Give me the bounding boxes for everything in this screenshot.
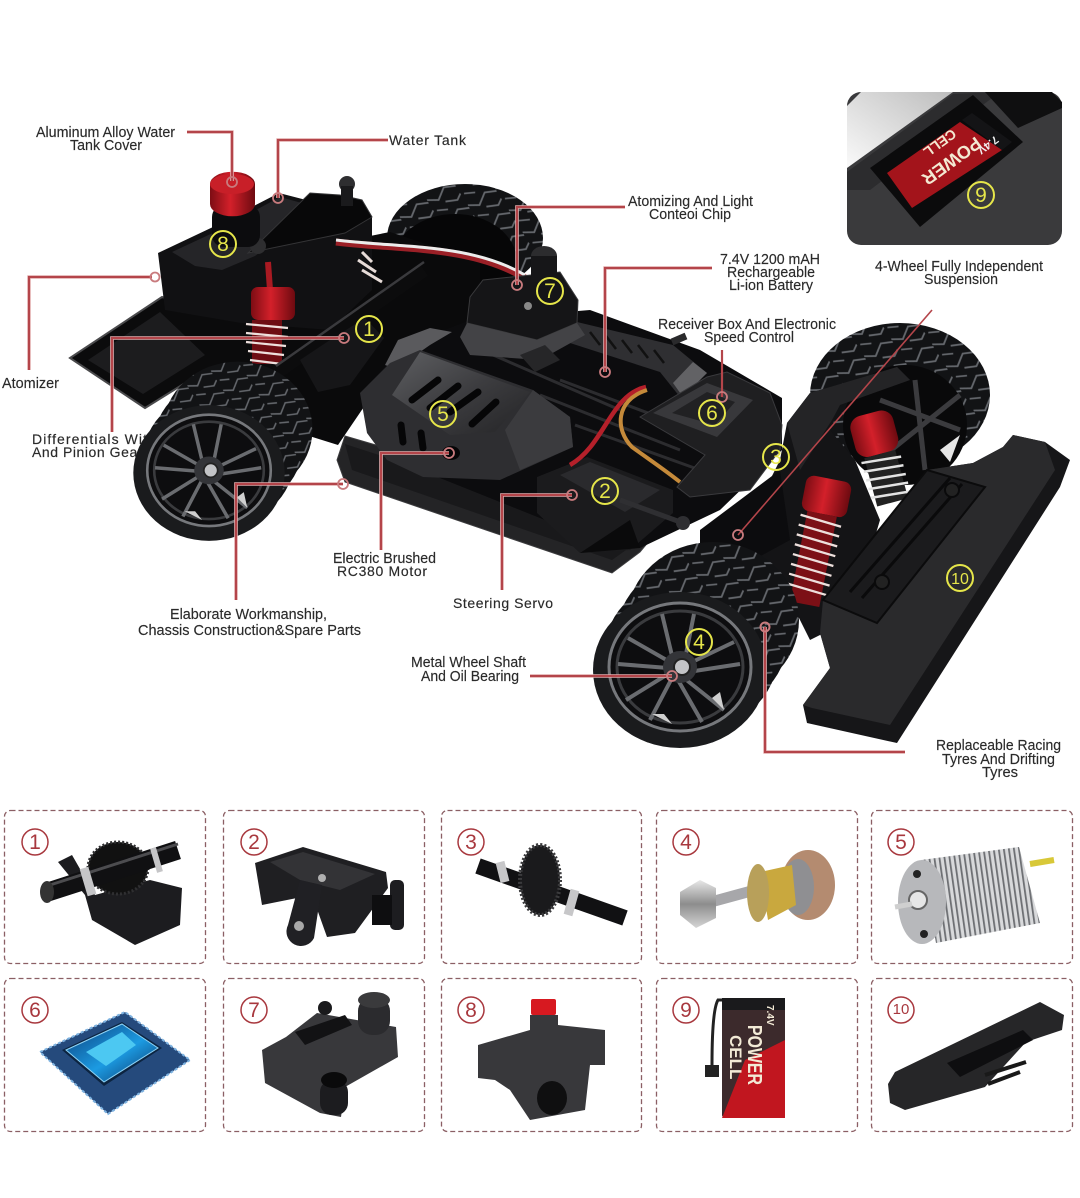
callout labels: Water Tank bbox=[389, 132, 467, 148]
yellow number markers: 10 bbox=[951, 571, 969, 588]
callout labels: Steering Servo bbox=[453, 595, 553, 611]
centre deck floor bbox=[360, 310, 782, 548]
front bumper bbox=[803, 435, 1070, 743]
callout labels: Tyres bbox=[982, 764, 1018, 781]
card 10: bumper part bbox=[872, 978, 1072, 1132]
callout labels: Atomizer bbox=[2, 375, 59, 392]
chevron battery strip bbox=[570, 322, 707, 397]
callout labels: Speed Control bbox=[704, 329, 794, 346]
number marker 9: 9 bbox=[975, 184, 987, 207]
gray fender bbox=[385, 328, 452, 372]
card 2: steering servo bbox=[224, 810, 424, 964]
callout labels: Chassis Construction&Spare Parts bbox=[138, 622, 361, 639]
rear shock absorber bbox=[246, 262, 295, 364]
servo wires bbox=[336, 240, 525, 278]
wheel: front right bbox=[593, 542, 799, 748]
yellow number markers: 3 bbox=[770, 446, 782, 469]
card 3: drive shaft bbox=[442, 810, 642, 964]
water tank block bbox=[158, 176, 372, 330]
steering servo bbox=[537, 457, 690, 553]
card 10: bumper part: 10 bbox=[893, 1001, 909, 1018]
callout labels: Li-ion Battery bbox=[729, 277, 813, 294]
callout labels: 7.4V 1200 mAH bbox=[720, 251, 820, 268]
electronic speed control box bbox=[640, 372, 782, 497]
card 9: battery pack bbox=[656, 978, 858, 1132]
callout labels bbox=[2, 124, 1061, 781]
yellow number markers: 6 bbox=[706, 402, 718, 425]
water tank cap bbox=[210, 172, 255, 216]
card 6: processor chip: 6 bbox=[29, 999, 41, 1022]
battery in inset: CELL bbox=[920, 126, 959, 161]
leader target dots bbox=[150, 177, 743, 681]
card 9: battery pack: 7.4V bbox=[764, 1005, 775, 1026]
yellow number markers: 1 bbox=[363, 318, 375, 341]
yellow number markers: 8 bbox=[217, 233, 229, 256]
callout labels: Receiver Box And Electronic bbox=[658, 316, 836, 333]
callout labels: RC380 Motor bbox=[337, 563, 427, 579]
card 8: water tank part bbox=[442, 978, 642, 1132]
yellow number markers bbox=[210, 231, 973, 655]
rear far wheel bbox=[387, 184, 543, 310]
parts grid bbox=[4, 810, 1072, 1132]
far shock absorber bbox=[848, 408, 914, 508]
card 8: water tank part: 8 bbox=[465, 999, 477, 1022]
card 5: electric motor: 5 bbox=[895, 831, 907, 854]
callout labels: Replaceable Racing bbox=[936, 737, 1061, 754]
inset: battery compartment bbox=[847, 92, 1062, 245]
yellow number markers: 7 bbox=[544, 280, 556, 303]
motor cover bbox=[360, 350, 573, 480]
label: differentials: Differentials With R bbox=[32, 431, 172, 447]
battery in inset: POWER bbox=[918, 133, 985, 189]
card 4: wheel shaft bbox=[656, 810, 858, 964]
front shock absorber bbox=[783, 474, 853, 609]
callout labels: 4-Wheel Fully Independent bbox=[875, 258, 1044, 275]
wheel: rear left bbox=[133, 362, 313, 541]
card 5: electric motor bbox=[872, 810, 1072, 964]
card 7: control box: 7 bbox=[248, 999, 260, 1022]
yellow number markers: 4 bbox=[693, 631, 705, 654]
front chassis plate bbox=[337, 436, 660, 573]
rear mid section bbox=[268, 232, 480, 445]
callout labels: Elaborate Workmanship, bbox=[170, 606, 327, 623]
callout labels: Metal Wheel Shaft bbox=[411, 654, 527, 671]
card 9: battery pack: 9 bbox=[680, 999, 692, 1022]
card 7: control box bbox=[224, 978, 424, 1132]
rear drive shaft and differential bbox=[276, 252, 424, 392]
card 6: processor chip bbox=[4, 978, 206, 1132]
callout labels: Atomizing And Light bbox=[628, 193, 754, 210]
leader lines bbox=[29, 132, 932, 590]
card 1: differential: 1 bbox=[29, 831, 41, 854]
front suspension frame bbox=[700, 367, 910, 640]
card 3: drive shaft: 3 bbox=[465, 831, 477, 854]
card 9: battery pack: CELL bbox=[726, 1035, 745, 1079]
leader: replaceable tyres bbox=[760, 622, 905, 752]
electronics wires bbox=[570, 387, 680, 482]
callout labels: Aluminum Alloy Water bbox=[36, 124, 175, 141]
rear tray bbox=[70, 297, 340, 440]
card 2: steering servo: 2 bbox=[248, 831, 260, 854]
callout labels: Tank Cover bbox=[70, 137, 142, 154]
yellow number markers: 2 bbox=[599, 480, 611, 503]
card 9: battery pack: POWER bbox=[743, 1025, 765, 1085]
atomizer and light chip box bbox=[460, 246, 585, 372]
callout labels: Suspension bbox=[924, 271, 998, 288]
callout labels: And Oil Bearing bbox=[421, 668, 519, 685]
callout labels: Conteoi Chip bbox=[649, 206, 731, 223]
battery in inset bbox=[887, 113, 1012, 208]
callout labels: Electric Brushed bbox=[333, 550, 436, 567]
yellow number markers: 5 bbox=[437, 403, 449, 426]
callout labels: Rechargeable bbox=[727, 264, 815, 281]
callout labels: Tyres And Drifting bbox=[942, 751, 1055, 768]
card 4: wheel shaft: 4 bbox=[680, 831, 692, 854]
card 1: differential bbox=[4, 810, 206, 964]
label: differentials: And Pinion Gears bbox=[32, 444, 150, 460]
number marker 9 bbox=[968, 182, 994, 208]
far front wheel bbox=[810, 323, 990, 485]
leaders over wheels bbox=[236, 484, 672, 676]
panel: car diagram bbox=[29, 132, 1070, 752]
label: differentials bbox=[32, 431, 172, 460]
battery in inset: 7.4V bbox=[975, 133, 1000, 156]
